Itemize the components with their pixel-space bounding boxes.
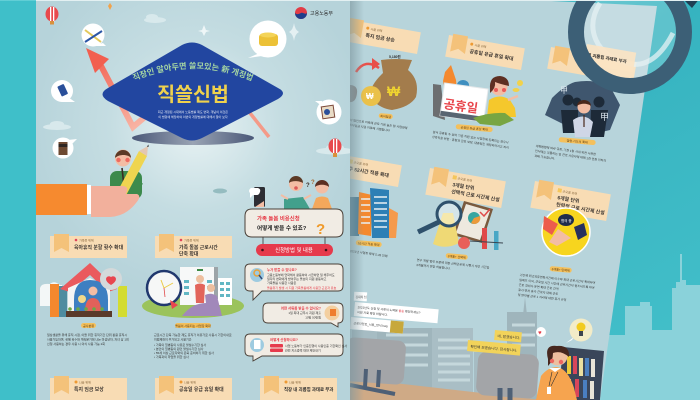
label pill: 법령·기도의 확대 (566, 138, 588, 145)
description (154, 332, 232, 359)
buildings (352, 297, 537, 400)
card: workplace harassment (260, 376, 337, 400)
icon: heart bubble: ♥ (538, 330, 542, 336)
card: workplace harassment: 직장 내 괴롭힘 과태료 부과 (284, 386, 333, 393)
text (281, 306, 321, 320)
description: • 가족의 질병등의 사유로 불필수기한 심사 (154, 342, 206, 347)
header: 근로를 위해 (562, 188, 578, 196)
label pill: 돌봄이 사용되는 사업장 확대 (175, 323, 211, 328)
description (416, 257, 490, 275)
man (110, 150, 143, 199)
header: 단축 확대 (179, 250, 199, 258)
bubble: coffee (52, 138, 77, 158)
text (267, 267, 337, 290)
magnified header: 내 괴롭힘 과태료 부과 (587, 51, 627, 65)
description: 개정법령에 따라 규정, 기준 1일 사내 외관 사용한 (535, 143, 597, 156)
title description: 최근 개정된 시대에서 노동법률 제도 변화, 개념이 이것은 (158, 109, 228, 114)
description: 기간제 최고외유연화사건에 이수와 최대 근로시간의 확대하여 (520, 272, 596, 285)
card: caregiving hours (142, 234, 244, 359)
description: 휴가 연차 휴가 근로자 대해 근로 (518, 287, 559, 296)
header: 육아휴직 분할 횟수 확대 (74, 244, 124, 251)
description: 상용직을 위한 · 휴일과 근로 보장, 대휴일은 개정되어지고 까지 (432, 134, 509, 150)
bubble: pens (82, 24, 106, 46)
description: 연구 개발 업무 부문에 대한 선택근로제 시행시 개선 시간을 (417, 257, 490, 270)
red label pill: 신청방법 및 내용 (275, 246, 313, 254)
bubble: how to apply (245, 334, 347, 361)
title description: 이 법령에 해당하여 이번의 개정법률에 대해서 알아 보자 (158, 114, 228, 119)
ring (576, 0, 684, 86)
header (425, 166, 506, 208)
question heading red: 가족 돌봄 비용신청 (257, 214, 300, 222)
bubble: how much (263, 303, 343, 327)
description: 인식에는 괴롭히는 및 근로 사용자에 대해 1천 만원 이하의 (535, 148, 607, 163)
man and woman (281, 176, 332, 209)
header: 가족을 위해 (184, 238, 199, 242)
bubble: id cards (315, 100, 342, 124)
right page (350, 1, 657, 400)
header: 가족을 위해 (79, 238, 94, 242)
monitor left (344, 337, 406, 394)
chat: request message: 이번 자료 확인 바랍니다. (357, 309, 388, 317)
illustration: calendar and woman: 공휴일 (443, 96, 479, 116)
building windows (386, 325, 535, 380)
chat: attachment: 근로자정보_서류_양식.hwp (353, 320, 388, 328)
text: 돌봄위기 발생 시 지원 가족돌봄에게 사용한 근로자 유효 (267, 285, 337, 290)
growth arrow (86, 48, 269, 137)
desk (350, 381, 536, 400)
description: 최저임금 지급 이후에 시행합니다 (349, 122, 390, 133)
description: 사용가능하며, 횟별 횟수와 계속분기에 나는 미성년자, 자녀 상 1회 (47, 336, 129, 342)
title tagline: 직장인 알아두면 쓸모있는 新 개정법 (132, 62, 254, 82)
icon: clipboard (250, 338, 264, 352)
label pill: 최저임금 (380, 113, 392, 119)
text: 누가 받을 수 있나요? (267, 267, 297, 272)
header: 특지 임금 상승 (365, 32, 396, 44)
page background (350, 1, 657, 400)
illustration: buildings (350, 188, 398, 238)
description: 신청 사용하는 경우 사용 시 의식 사용 가능 2회 (47, 341, 105, 346)
header: 탄력적 근로 시간제 신설 (556, 201, 606, 217)
woman (536, 346, 577, 400)
description: • 가족과의 학업을 위한 심사 (154, 354, 189, 359)
text: 고용노동부에 연락해서 활동하여 시급하면 일 해주어도 (267, 272, 335, 277)
header: 근로를 위해 (457, 175, 473, 183)
description: 근로시간 단축 가능한 제도 휴직가 이유가로 사용시 기한이내로 (154, 332, 232, 337)
header (445, 33, 525, 70)
illustration: money bag: ₩ (366, 92, 374, 101)
description: 3개월까지 연장 허용합니다. (416, 262, 451, 271)
card: public holiday (432, 33, 525, 150)
description: 앞서 공휴일 수 있어 기준 치원 있는 사업장에 등록되는 경우시 (432, 129, 509, 145)
description: 및 연차별 근로 1 자리에 대한 휴가 규정 (517, 292, 567, 302)
illustration: money bag: 5,180원 (389, 54, 401, 59)
connector pins (263, 237, 325, 246)
card: overtime premium (50, 376, 127, 400)
chat: request message: 2021년도 신청 및 서류의 노력을 활동 확인하세요? (357, 304, 421, 315)
illustration: house (40, 263, 127, 317)
bubble: who (245, 264, 343, 300)
chat: request message (354, 302, 439, 323)
header (547, 46, 636, 78)
label pill: 3개월+ 선택제 (448, 253, 466, 260)
bubble: usb (51, 80, 75, 102)
glass (582, 0, 678, 80)
description: 일에도 이의, 근로일 시간 시간에 근로시간의 협조되도록 하여 (519, 277, 595, 290)
text: 일자리 변화에게 받아주는 돌보미 지원 활동하고 (267, 276, 327, 281)
label pill: 공휴일 유급 휴일 확대 (460, 124, 488, 132)
phone (249, 187, 265, 207)
header (530, 179, 611, 221)
logo: ministry of employment and labor: 고용노동부 (310, 11, 333, 17)
illustration: dark crowd (545, 81, 620, 137)
description (47, 332, 129, 346)
description: • 55세 이상 근로자와의 은퇴 준비하기 위한 심사 (154, 350, 214, 355)
header (50, 234, 127, 258)
chat: name tag (354, 292, 367, 301)
label pill: 6개월+ 탄력제 (552, 266, 570, 273)
card: flexible hours 6m (517, 179, 611, 305)
cuff (87, 185, 91, 214)
monitor right (476, 351, 539, 400)
card: parental leave (40, 234, 129, 346)
label pill: 공사분류 (83, 323, 94, 328)
top edge line (36, 0, 700, 1)
icon: question mark: ? (316, 221, 325, 238)
hand (91, 186, 139, 217)
header: 근로를 위해 (353, 159, 369, 167)
sparkles (108, 3, 299, 41)
card: workplace harassment: 나를 위해 (289, 380, 301, 384)
header: 가족 돌봄 근로시간 (179, 244, 218, 251)
man and woman: ? (311, 180, 315, 186)
header: 선택적 근로 시간제 신설 (451, 188, 501, 204)
description (517, 272, 596, 305)
bookshelf (558, 347, 604, 400)
handle (678, 0, 700, 8)
chat: reply 1: 네, 알겠습니다. (497, 333, 520, 340)
shadow ellipse (132, 131, 254, 145)
card: public holiday: 공휴일 유급 휴일 확대 (179, 386, 224, 393)
illustration: clock and hospital (142, 267, 244, 318)
magnifying glass (576, 0, 700, 86)
header: 공휴일 유급 휴일 확대 (469, 48, 514, 63)
text: 어떻게 신청하나요? (270, 337, 298, 342)
description: 근로 경비사 유연 확대 근로 간격 (519, 282, 559, 291)
chat: attachment (350, 317, 404, 334)
question speech box (245, 209, 343, 238)
description: 2021년 사업장 확대 5-49 인에 (349, 248, 388, 258)
title diamond (102, 42, 283, 140)
left page (36, 1, 350, 400)
card: working hours scope (350, 156, 402, 258)
illustration: money bag (349, 54, 417, 110)
header: 6개월 단위 (557, 194, 580, 205)
header: 나를 위해 (370, 26, 383, 33)
text: 사업 노동부가 인증진행이 사용인증 기한확인 심사 (285, 343, 347, 348)
label pill: 52시간 적용 확대 (358, 240, 380, 247)
text: 가족돌봄 사용한 사람은 (267, 280, 297, 285)
text: 어떤 서류를 받을 수 있나요? (281, 306, 321, 310)
icon: heart bubble (536, 327, 546, 337)
illustration: handshake: 협의 중 (561, 218, 572, 223)
pencil (114, 144, 148, 203)
logo: ministry of employment and labor (295, 7, 333, 19)
red label pill (256, 244, 333, 256)
chat: name tag: 김대리 님 (356, 295, 367, 299)
text: 10일 50만원 (305, 314, 321, 320)
text: 관련 지출증액 대한 제안내기 (285, 348, 321, 352)
card: overtime premium: 특지 임금 보상 (74, 386, 104, 393)
illustration: dark crowd: 甲 (560, 86, 568, 95)
question heading black: 어떻게 받을 수 있죠? (257, 224, 307, 232)
clouds (43, 14, 354, 194)
main title: 직쓸신법 (157, 84, 229, 106)
icon: coins (324, 306, 340, 320)
chat: reply 2 (467, 340, 521, 356)
card: flexible hours 3m (416, 166, 506, 275)
header (350, 18, 421, 54)
sleeve (36, 184, 87, 215)
illustration: people with phone (249, 176, 332, 209)
description: • 본인의 질병등의 원인 불필수기한 심사 (154, 346, 204, 351)
icon: lightbulb bubble (566, 318, 592, 343)
chat: reply 1 (494, 330, 522, 342)
header (350, 156, 402, 187)
page background (36, 1, 356, 400)
title description (158, 109, 228, 119)
header: 3개월 단위 (452, 181, 475, 192)
gutter shadow (350, 0, 364, 400)
illustration: money bag: ₩ (387, 83, 401, 99)
icon: hot air balloons (46, 6, 342, 157)
description: 지원제한이 추가되고 사용기간 (154, 336, 192, 342)
man and woman: ? (306, 183, 310, 189)
city skyline (600, 254, 700, 400)
chat: reply 2: 확인해 보겠습니다. 감사합니다. (470, 344, 517, 353)
header: 나를 위해 (474, 42, 487, 49)
header (155, 234, 232, 258)
illustration: flask and magnifier (418, 201, 503, 250)
text (270, 337, 347, 352)
teal left strip (0, 1, 36, 400)
city and office scene (344, 292, 604, 400)
illustration: man with pencil in hand (36, 144, 148, 217)
description: 과태 가능합니다. (534, 153, 556, 161)
highlight (593, 3, 673, 64)
text: 1일 최대 근무시 지원 제출 (288, 310, 321, 315)
card: harassment (534, 45, 637, 168)
bubble: coins (248, 20, 286, 58)
description: 이 법인으로 이후에 근로 기본 높은 일 사업장에 (349, 117, 408, 130)
illustration: dark crowd: 甲 (600, 112, 609, 122)
card: public holiday (155, 376, 232, 400)
card: public holiday: 나를 위해 (184, 380, 196, 384)
card: overtime premium: 나를 위해 (79, 380, 91, 384)
description: 일상생활을 위해 휴직 시점, 이들 위한 휴직기간 단위 활용 휴직시 (47, 332, 127, 337)
header: 주 52시간 적용 확대 (348, 165, 390, 179)
card: overtime premium (350, 18, 421, 132)
icon: magnifier (250, 268, 264, 282)
